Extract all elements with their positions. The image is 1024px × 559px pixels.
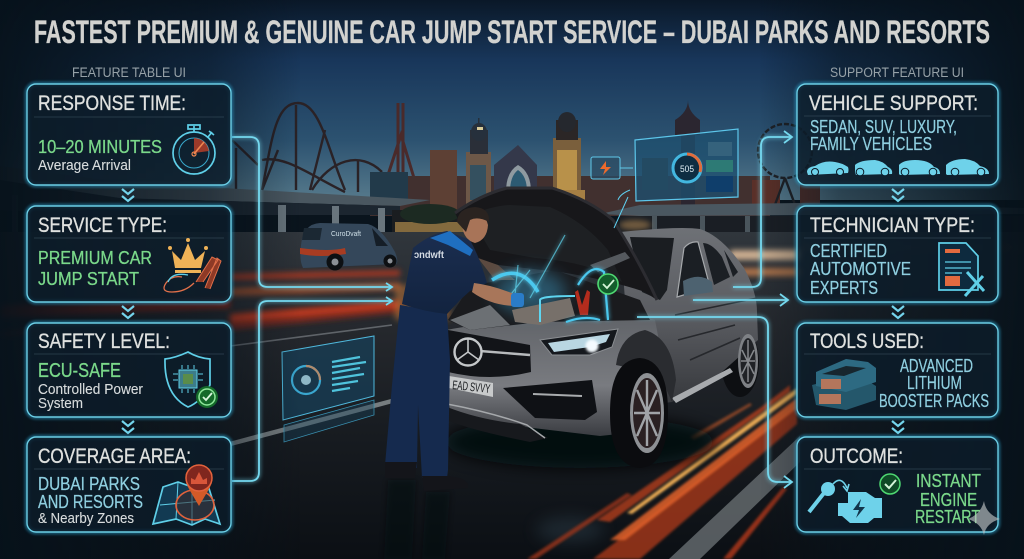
car: engine glow: [494, 270, 566, 314]
text: advanced lithium booster packs: [879, 356, 989, 411]
connector: response time to engine: [232, 137, 392, 291]
text: vehicle types: [810, 117, 957, 154]
text: nearby zones: & Nearby Zones: [38, 510, 134, 527]
icon: map with location pin: [153, 465, 220, 525]
car: mirror: [683, 277, 713, 296]
text: certified automotive experts: AUTOMOTIVE: [810, 259, 911, 279]
label: support feature ui: SUPPORT FEATURE UI: [830, 65, 964, 80]
text: advanced lithium booster packs: LITHIUM: [907, 373, 962, 393]
mechanic: floor shadow: [384, 480, 450, 559]
delivery van: [300, 223, 397, 270]
car: glowing energy arcs: [492, 235, 608, 322]
connector: engine to vehicle support: [733, 131, 792, 287]
chevron: vehicle to technician: [892, 189, 904, 201]
car: engine bay: [448, 270, 650, 330]
text: controlled power system: System: [38, 395, 83, 412]
mechanic: arm: [472, 283, 514, 306]
panel: safety level: [27, 323, 231, 417]
panel: tools used: [797, 323, 998, 417]
heading: safety level: SAFETY LEVEL:: [38, 329, 170, 353]
watermark: sparkle: [968, 501, 1000, 535]
road lane markings: [230, 325, 800, 559]
heading: coverage area: COVERAGE AREA:: [38, 444, 191, 468]
heading: outcome: OUTCOME:: [810, 444, 903, 468]
car: under-car shadow: [445, 416, 715, 468]
value: instant engine restart: ENGINE: [920, 489, 977, 510]
panel: service type: [27, 206, 231, 302]
value: instant engine restart: RESTART: [915, 506, 980, 527]
text: controlled power system: Controlled Power: [38, 381, 143, 398]
chevron: service to safety: [122, 306, 134, 318]
light streaks: [0, 245, 1024, 559]
connector: coverage area to engine: [232, 297, 392, 481]
connector: engine to outcome: [637, 317, 792, 488]
mechanic: torso: [402, 231, 487, 314]
car: front nose: [446, 310, 662, 436]
text: average arrival: Average Arrival: [38, 157, 131, 174]
text: certified automotive experts: CERTIFIED: [810, 241, 887, 261]
heading: vehicle support: VEHICLE SUPPORT:: [809, 91, 978, 115]
value: dubai parks and resorts: [38, 474, 143, 512]
heading: service type: SERVICE TYPE:: [38, 213, 167, 237]
car: rear tyre: [721, 327, 759, 397]
car: open hood: [455, 188, 657, 300]
panel: coverage area: [27, 437, 231, 532]
car: [445, 188, 759, 468]
car: rear wheel rim: [738, 334, 758, 388]
value: instant engine restart: INSTANT: [916, 470, 981, 491]
car: emblem: [454, 338, 482, 366]
car: wheel arch: [616, 330, 676, 402]
icon: lithium booster packs: [812, 359, 876, 410]
text: certified automotive experts: [810, 241, 911, 298]
background scene: sky: [0, 0, 1024, 200]
car: licence plate: [449, 376, 493, 397]
skyline: roller coaster: [232, 103, 414, 192]
mechanic: boots: [385, 462, 468, 491]
heading: response time: RESPONSE TIME:: [38, 91, 186, 115]
panel: vehicle support: [797, 84, 998, 185]
panel: technician type: [797, 206, 998, 302]
mechanic: head: [457, 207, 489, 243]
text: certified automotive experts: EXPERTS: [810, 278, 878, 298]
mechanic: shoulder stripe: [430, 231, 473, 256]
car: windshield: [630, 237, 674, 300]
icon: crown and jumper cables: [164, 238, 221, 292]
car: headlight: [540, 329, 618, 355]
icon: document with toolbox and wrench: [939, 243, 984, 296]
connector: engine to technician type: [693, 294, 788, 306]
car: lower intake: [503, 380, 597, 420]
icon: shield with chip and check: [165, 352, 218, 408]
chevron: safety to coverage: [122, 421, 134, 433]
value: 10–20 minutes: 10–20 MINUTES: [38, 136, 162, 157]
road fog: [536, 517, 604, 543]
panel: response time: [27, 84, 231, 185]
car: door lines: [675, 298, 757, 360]
text: vehicle types: FAMILY VEHICLES: [810, 134, 932, 154]
mechanic: legs: [385, 305, 450, 478]
chevron: response to service: [122, 189, 134, 201]
skyline: drop tower: [387, 103, 414, 178]
dashboard hologram: [614, 129, 738, 228]
text: controlled power system: [38, 381, 143, 412]
chevron: technician to tools: [892, 306, 904, 318]
mechanic: glove: [511, 293, 524, 307]
text: vehicle types: SEDAN, SUV, LUXURY,: [810, 117, 957, 137]
value: dubai parks and resorts: AND RESORTS: [38, 492, 143, 512]
value: instant engine restart: [915, 470, 981, 527]
icon: stopwatch: [173, 125, 215, 174]
car: body side: [620, 228, 758, 405]
heading: technician type: TECHNICIAN TYPE:: [810, 213, 975, 237]
car: green check badge: [598, 274, 618, 294]
chevron: tools to outcome: [892, 421, 904, 433]
icon: four vehicles: [807, 159, 989, 176]
panel: outcome: [797, 437, 998, 532]
canopy left: [0, 166, 430, 237]
road: [0, 232, 1024, 559]
side vignette left: [0, 0, 300, 559]
car: side step: [672, 368, 733, 403]
text: advanced lithium booster packs: ADVANCED: [900, 356, 973, 376]
mechanic: back logo: ɔndwft: [414, 249, 444, 261]
skyline: ferris wheel: [758, 124, 812, 210]
side vignette right: [760, 0, 1024, 559]
value: premium car jump start: PREMIUM CAR: [38, 247, 152, 268]
value: dubai parks and resorts: DUBAI PARKS: [38, 474, 140, 494]
car: front wheel: [610, 358, 668, 468]
value: premium car jump start: [38, 247, 152, 289]
car: hood underside: [470, 205, 622, 282]
label: feature table ui: FEATURE TABLE UI: [72, 65, 186, 80]
car: licence plate: EAD SVVY: [452, 378, 491, 396]
icon: key, engine and check: [809, 474, 900, 523]
battery hologram: [591, 157, 633, 179]
delivery van: CuroDvaft: [331, 229, 362, 238]
car: battery booster: [450, 296, 575, 330]
mechanic: [384, 207, 524, 559]
car: side windows: [677, 242, 710, 297]
palm trees and glow: [392, 204, 467, 234]
dashboard hologram: 505: [680, 164, 694, 174]
car: red clamp: [575, 290, 590, 315]
lower left hologram: [282, 336, 374, 442]
value: premium car jump start: JUMP START: [38, 268, 139, 289]
skyline: buildings: [370, 100, 820, 216]
car: grille: [448, 330, 531, 377]
heading: tools used: TOOLS USED:: [810, 329, 924, 353]
canopy right: [600, 203, 1024, 238]
value: ecu-safe: ECU-SAFE: [38, 360, 121, 382]
